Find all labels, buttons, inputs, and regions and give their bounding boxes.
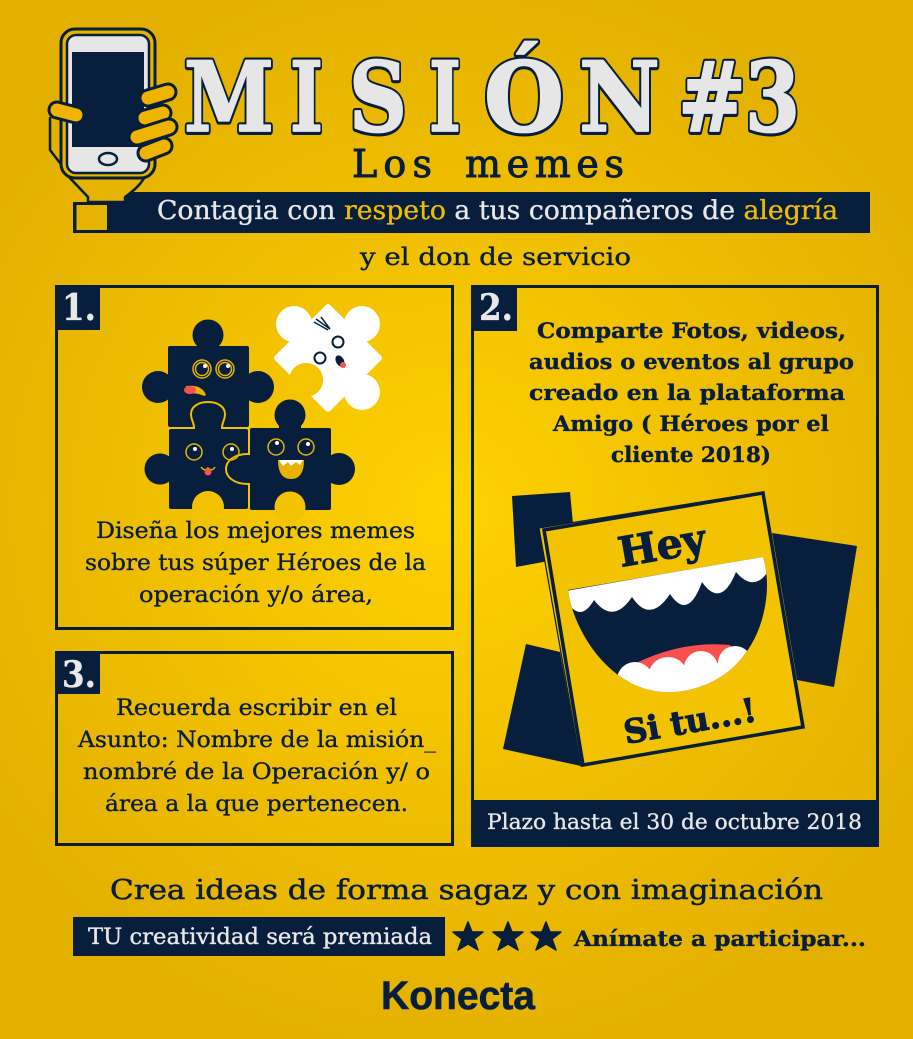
navy subtitle banner: [73, 192, 870, 233]
panel 1 text: [85, 519, 426, 608]
title: [184, 41, 800, 154]
deadline bar: Plazo hasta el 30 de octubre 2018: [487, 810, 862, 834]
panel 2 text: audios o eventos al grupo: [529, 349, 854, 374]
panel 1 text: Diseña los mejores memes: [96, 519, 415, 544]
title: S: [349, 41, 407, 154]
icon: white puzzle piece: [247, 265, 421, 439]
title: I: [429, 41, 461, 154]
subtitle: Los memes: memes: [465, 142, 624, 186]
prize banner: TU creatividad será premiada: [88, 925, 432, 950]
title: N: [579, 41, 660, 154]
face: top piece: [186, 360, 314, 470]
panel 1 text: operación y/o área,: [139, 583, 373, 608]
title: Ó: [484, 41, 564, 154]
panel 3 text: área a la que pertenecen.: [105, 792, 408, 817]
panel 2 text: [529, 318, 854, 467]
title: #: [678, 41, 746, 154]
illustration: talking mouth card: [503, 492, 857, 766]
icon: hand holding phone: [50, 29, 169, 202]
prize banner: [73, 917, 445, 956]
number 1: 1.: [62, 287, 96, 329]
panel 2: share: [471, 286, 879, 847]
title: N: [579, 41, 660, 154]
navy subtitle banner: Contagia con respeto a tus compañeros de alegría: [157, 196, 838, 226]
panel 2 text: Comparte Fotos, videos,: [537, 318, 846, 343]
title: I: [429, 41, 461, 154]
panel 3 text: [77, 696, 436, 817]
panel 2 text: creado en la plataforma: [529, 380, 845, 405]
panel 3 text: Asunto: Nombre de la misión_: [77, 728, 436, 753]
title: 3: [745, 41, 800, 154]
title: M: [184, 41, 274, 154]
title: I: [290, 41, 323, 154]
panel 3 text: Recuerda escribir en el: [116, 696, 397, 721]
panel 1: design memes: [56, 265, 452, 628]
subtitle: Los memes: [352, 142, 624, 186]
panel 1 text: sobre tus súper Héroes de la: [85, 551, 426, 576]
Hey: Hey: [614, 514, 711, 577]
subtitle: Los memes: Los: [352, 142, 432, 186]
tagline: y el don de servicio: [359, 243, 631, 271]
panel 3: subject: [56, 652, 452, 844]
title: Ó: [484, 41, 564, 154]
title: I: [290, 41, 323, 154]
panel 2 text: Amigo ( Héroes por el: [552, 411, 829, 436]
panel 3 text: nombré de la Operación y/ o: [83, 760, 430, 785]
closing line: Crea ideas de forma sagaz y con imaginación: [110, 875, 823, 906]
logo: Konecta: Konecta: [381, 974, 536, 1018]
title: S: [349, 41, 407, 154]
Si tu: Si tu...!: [621, 690, 759, 752]
title: #: [678, 41, 746, 154]
icon: three stars: [453, 922, 561, 950]
number 2: 2.: [479, 287, 513, 329]
deadline bar: [471, 800, 879, 847]
call to action: Anímate a participar...: [573, 926, 866, 951]
title: 3: [745, 41, 800, 154]
number 3: 3.: [62, 654, 96, 696]
title: M: [184, 41, 274, 154]
panel 2 text: cliente 2018): [611, 442, 771, 467]
mouth: [568, 557, 767, 692]
icon: navy puzzle pieces with faces: [142, 320, 355, 523]
